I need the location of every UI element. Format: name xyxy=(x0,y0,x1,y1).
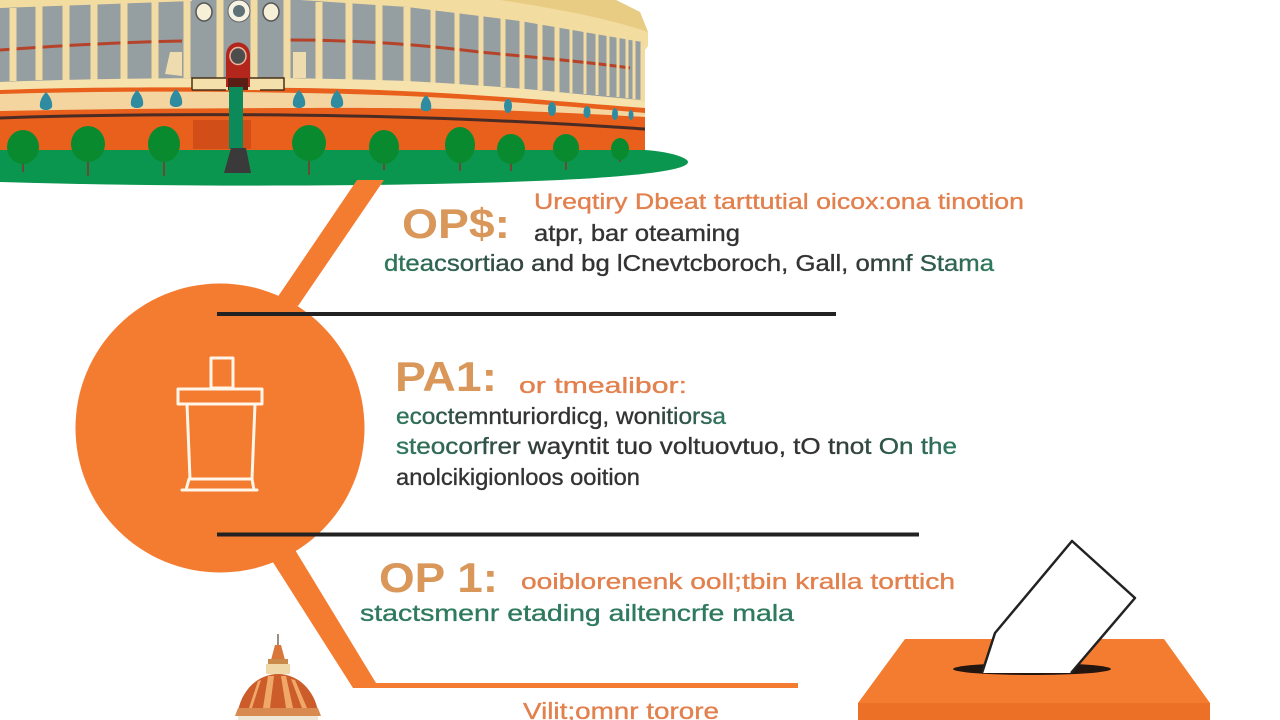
text block: PA1: PA1: xyxy=(395,353,497,400)
text block: OP 1: ooiblorenenk ooll;tbin kralla torttich xyxy=(521,569,955,594)
lower walls xyxy=(0,78,645,110)
circle badge with ballot icon xyxy=(76,284,364,572)
ballot paper xyxy=(982,541,1135,673)
small cream statues xyxy=(165,52,182,76)
text block: OP$ xyxy=(384,189,1024,276)
text block: OP$: dteacsortiao and bg lCnevtcboroch, Gall, omnf Stama xyxy=(384,250,994,276)
central portico xyxy=(192,0,290,78)
icon: ballot box outline xyxy=(178,358,262,490)
text block: PA1: or tmealibor: xyxy=(519,373,687,398)
text block: OP$: Ureqtiry Dbeat tarttutial oicox:ona tinotion xyxy=(534,189,1024,214)
lawn xyxy=(0,150,688,186)
text block: PA1: steocorfrer wayntit tuo voltuovtuo, tO tnot On the xyxy=(396,433,957,459)
central stem and base xyxy=(229,87,243,149)
text block: PA1: anolcikigionloos ooition xyxy=(396,464,640,490)
text block: PA1 xyxy=(395,353,957,490)
drops xyxy=(40,89,633,120)
text block: OP$: OP$: xyxy=(402,200,510,247)
text block: OP 1: stactsmenr etading ailtencrfe mala xyxy=(360,600,794,626)
text block: OP 1: OP 1: xyxy=(379,554,498,601)
divider lines xyxy=(217,314,919,534)
illustration: small dome xyxy=(235,634,321,720)
illustration: parliament building xyxy=(0,0,688,186)
text block: PA1: ecoctemnturiordicg, wonitiorsa xyxy=(396,403,726,429)
connector: bottom xyxy=(262,535,798,688)
text block: OP$: atpr, bar oteaming xyxy=(534,220,740,246)
text block: OP 1 xyxy=(360,554,955,626)
trees xyxy=(23,155,620,176)
connector: top xyxy=(277,180,384,306)
illustration: ballot box with paper xyxy=(858,541,1210,720)
